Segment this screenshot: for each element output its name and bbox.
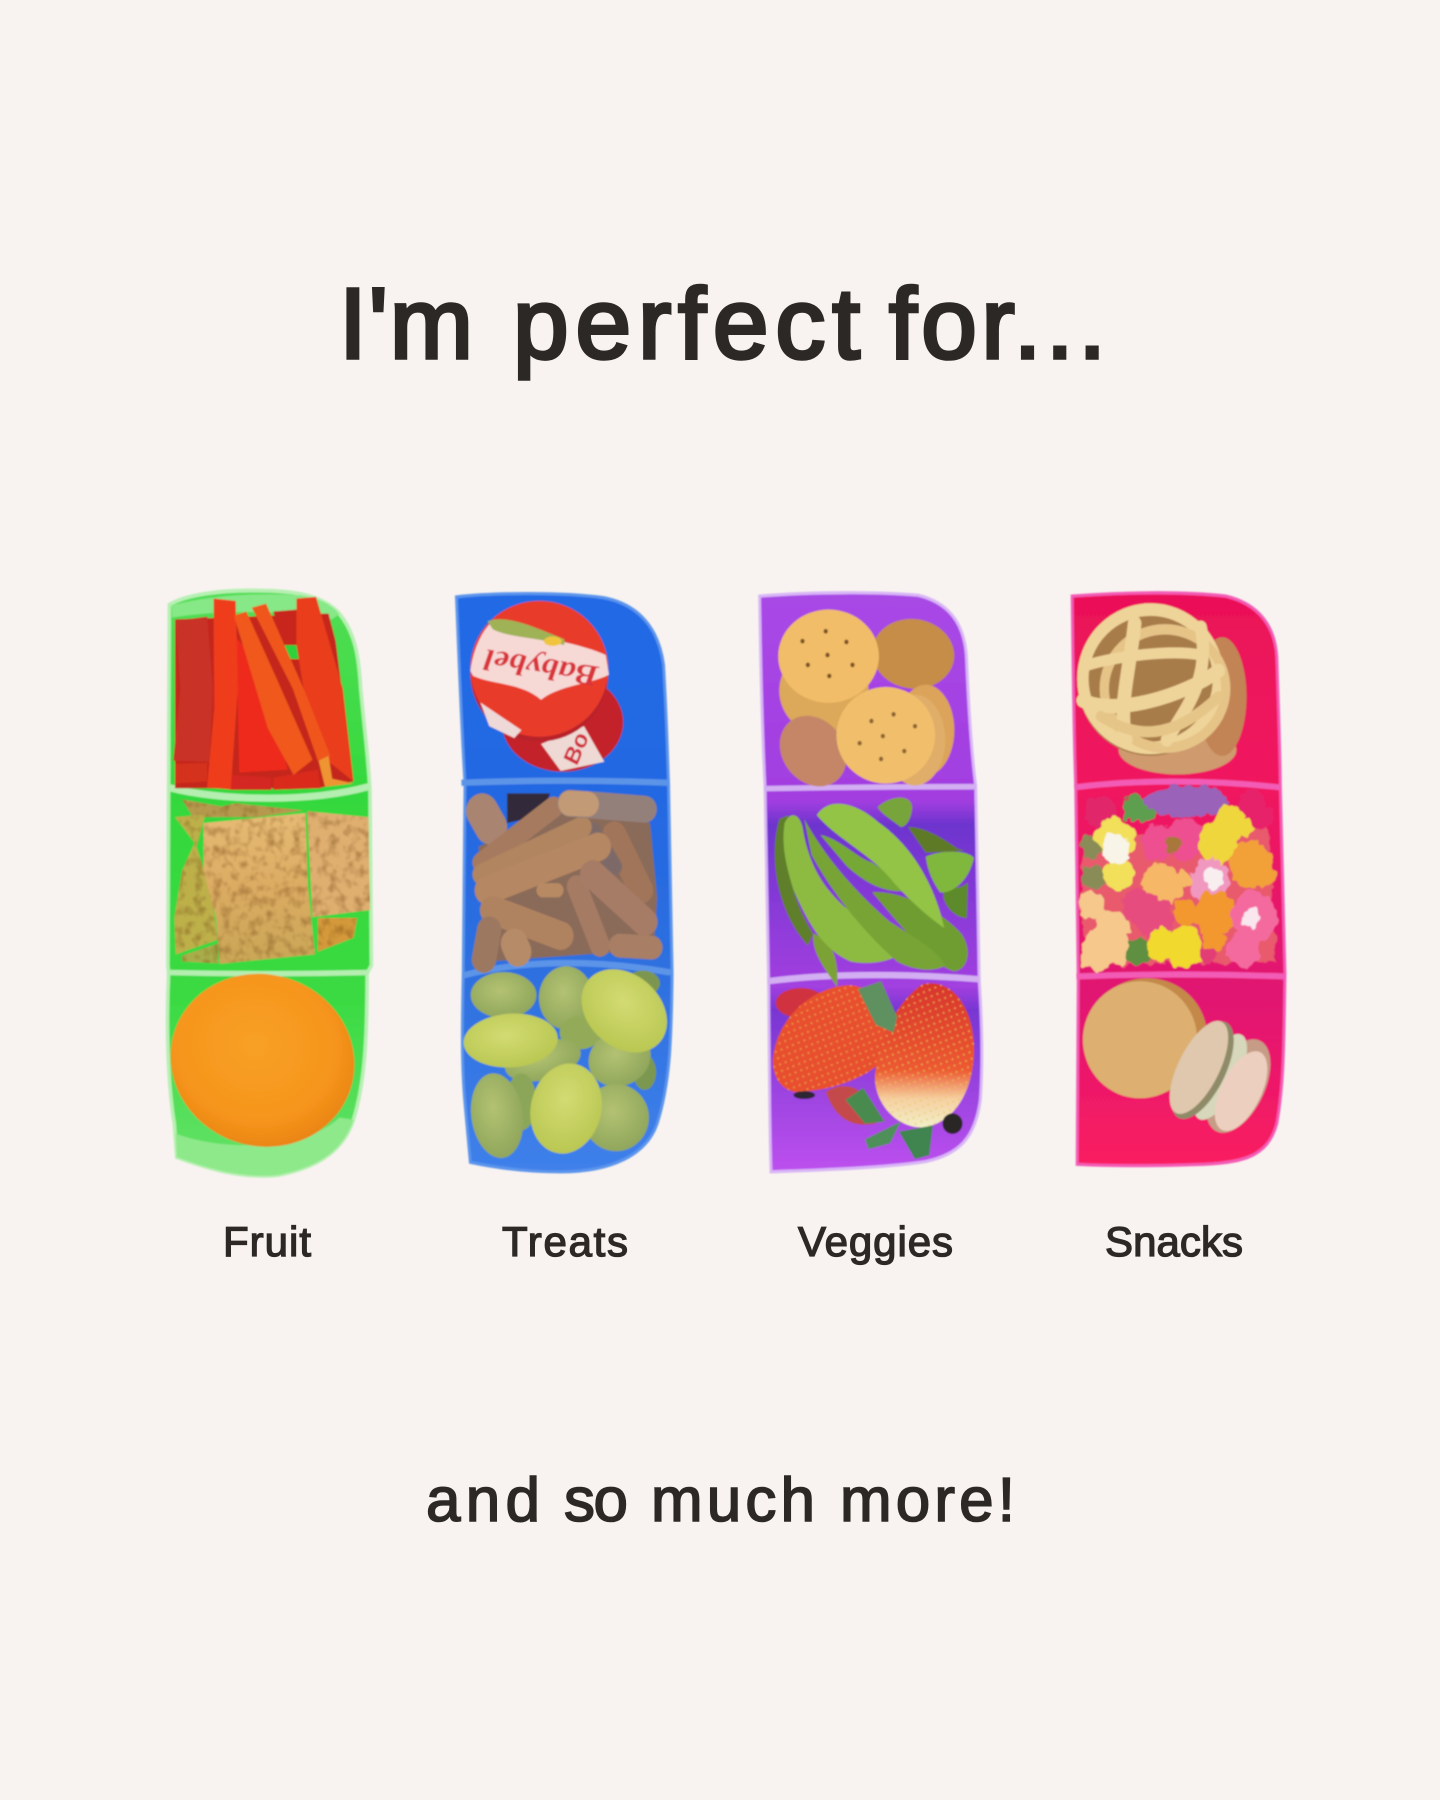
food: Babybel cheese: Babybel xyxy=(482,642,601,693)
panel: snacks tray (pink) xyxy=(1072,593,1285,1166)
food: colourful popcorn xyxy=(1079,785,1277,971)
food: Babybel cheese xyxy=(470,601,623,772)
tray dividers xyxy=(461,781,671,975)
label: Snacks: Snacks xyxy=(1105,1218,1243,1265)
food: orange xyxy=(160,961,365,1160)
panel: veggies tray (purple) xyxy=(760,593,982,1172)
tray body xyxy=(456,594,672,1172)
tray dividers xyxy=(1074,782,1285,976)
label: Veggies: Veggies xyxy=(798,1218,953,1265)
label: Treats: Treats xyxy=(502,1218,628,1265)
food: green grapes xyxy=(462,952,681,1165)
tray body xyxy=(760,593,982,1172)
closing line: so xyxy=(564,1466,628,1535)
label: Fruit: Fruit xyxy=(223,1218,311,1265)
panel: fruit tray (green) xyxy=(160,590,371,1176)
food: Babybel cheese: Bo xyxy=(559,728,594,769)
tray body xyxy=(167,590,371,1176)
tray body xyxy=(1072,593,1285,1166)
food: crackers xyxy=(767,610,957,801)
closing line: and xyxy=(426,1466,540,1535)
title: I'm xyxy=(339,268,473,380)
food: macarons xyxy=(1083,978,1284,1145)
closing line: more! xyxy=(840,1466,1015,1535)
title: for... xyxy=(889,268,1106,380)
food: chocolate fingers xyxy=(479,793,657,961)
closing line: much xyxy=(651,1466,815,1535)
title: perfect xyxy=(513,268,860,380)
food: red pepper strips xyxy=(173,597,354,790)
food: veggie wafers xyxy=(174,799,370,964)
food: strawberries xyxy=(773,981,974,1159)
tray rim floor and dividers xyxy=(169,594,369,1176)
tray dividers xyxy=(764,787,979,981)
food: edamame pods xyxy=(775,798,974,987)
food: pretzels xyxy=(1077,606,1246,774)
panel: treats tray (blue) xyxy=(456,594,681,1172)
